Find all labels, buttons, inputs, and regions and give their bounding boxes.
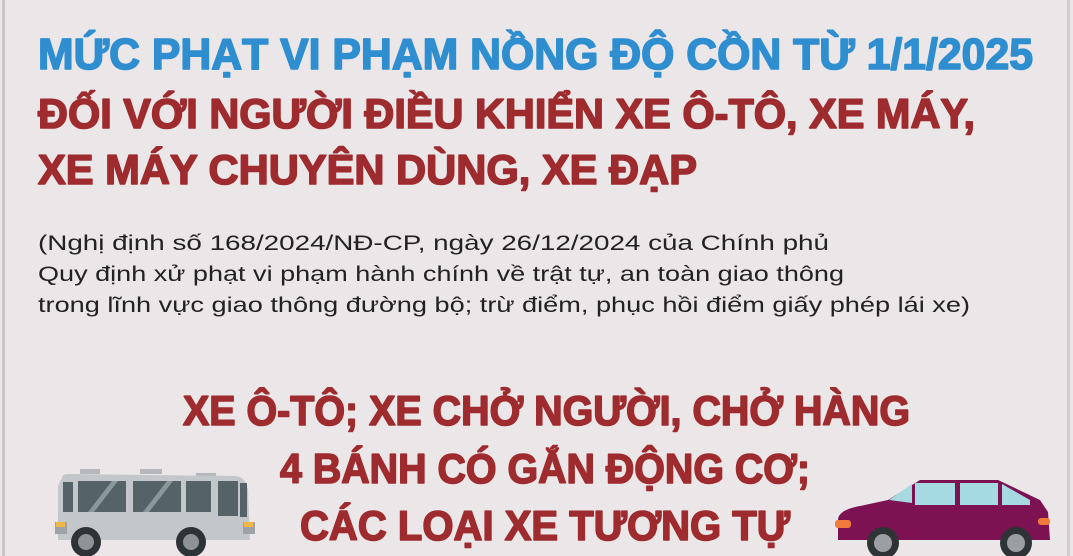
icon: car	[835, 480, 1050, 556]
legal reference text: trong lĩnh vực giao thông đường bộ; trừ điểm, phục hồi điểm giấy phép lái xe)	[38, 294, 970, 317]
icon: bus	[55, 469, 255, 556]
legal reference text	[38, 232, 970, 317]
legal reference text: (Nghị định số 168/2024/NĐ-CP, ngày 26/12/2024 của Chính phủ	[38, 232, 829, 255]
section heading: 4 BÁNH CÓ GẮN ĐỘNG CƠ;	[280, 444, 810, 492]
title: ĐỐI VỚI NGƯỜI ĐIỀU KHIỂN XE Ô-TÔ, XE MÁY,	[38, 89, 975, 137]
title: MỨC PHẠT VI PHẠM NỒNG ĐỘ CỒN TỪ 1/1/2025	[38, 28, 1033, 79]
legal reference text: Quy định xử phạt vi phạm hành chính về trật tự, an toàn giao thông	[38, 263, 844, 286]
title: XE MÁY CHUYÊN DÙNG, XE ĐẠP	[38, 145, 697, 193]
section heading	[183, 386, 910, 549]
section heading: CÁC LOẠI XE TƯƠNG TỰ	[300, 502, 790, 549]
section heading: XE Ô-TÔ; XE CHỞ NGƯỜI, CHỞ HÀNG	[183, 386, 910, 434]
title	[38, 28, 1033, 193]
